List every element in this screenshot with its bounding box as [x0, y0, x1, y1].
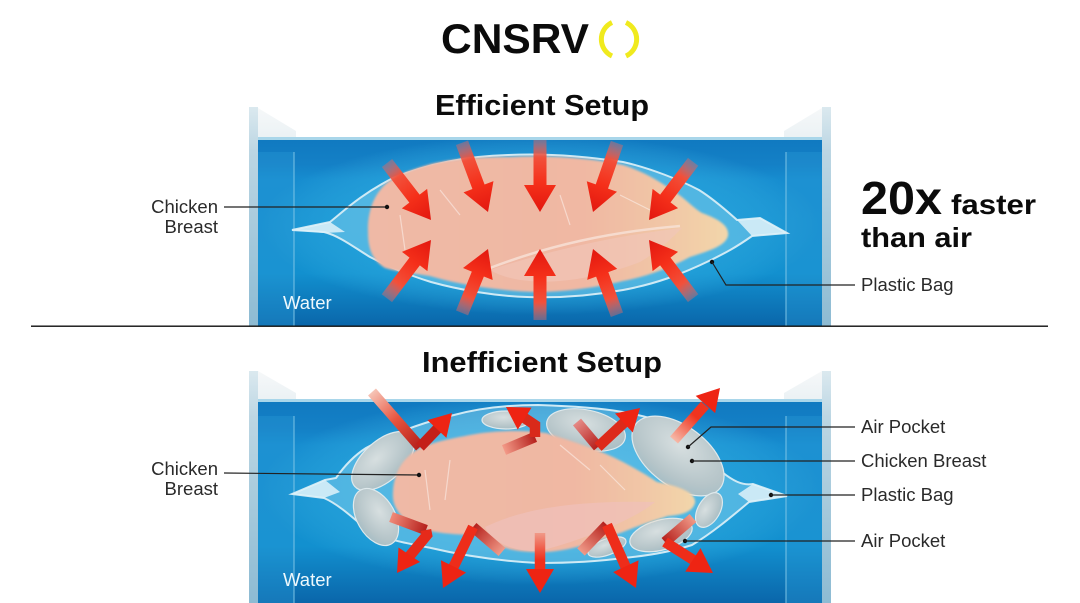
callout: chicken breast, efficient: Chicken: [151, 196, 218, 217]
air pockets: [341, 400, 738, 561]
brand name: CNSRV: [441, 15, 589, 62]
glass corners: [258, 108, 822, 140]
heading: efficient setup: Efficient Setup: [435, 90, 649, 122]
callout: chicken breast, inefficient: [151, 458, 421, 499]
tank walls: [249, 371, 831, 603]
tank walls: [249, 107, 831, 326]
callout: air pocket, bottom: [683, 530, 945, 551]
divider: [31, 326, 1048, 327]
heading: inefficient setup: Inefficient Setup: [422, 347, 662, 379]
callout: chicken breast, inefficient: Chicken: [151, 458, 218, 479]
icon: yellow ring: [601, 22, 637, 56]
arrows escaping: [372, 392, 705, 575]
plastic bag: [292, 154, 787, 297]
panel: efficient setup tank: [249, 107, 831, 326]
glass corners: [258, 371, 822, 402]
water: [258, 400, 822, 603]
callout: chicken breast, right: [690, 450, 986, 471]
callout: plastic bag, inefficient: Plastic Bag: [861, 484, 954, 505]
stat: 20x faster than air: than air: [861, 222, 972, 253]
callout: chicken breast, right: Chicken Breast: [861, 450, 986, 471]
water label: Water: [283, 569, 332, 590]
stat: 20x faster than air: faster: [951, 189, 1036, 220]
callout: plastic bag, efficient: [710, 260, 954, 295]
callout: air pocket, bottom: Air Pocket: [861, 530, 945, 551]
callout: air pocket, top: Air Pocket: [861, 416, 945, 437]
chicken breast: [368, 156, 728, 292]
callout: air pocket, top: [686, 416, 945, 449]
water label: Water: [283, 292, 332, 313]
stat: 20x faster than air: 20x: [861, 172, 942, 224]
stat: 20x faster than air: [861, 172, 1036, 253]
panel: inefficient setup tank: [249, 371, 831, 603]
logo: [441, 15, 637, 62]
callout: plastic bag, inefficient: [769, 484, 954, 505]
plastic bag: [292, 405, 787, 563]
chicken breast: [393, 431, 695, 552]
arrows pressing inward: [374, 137, 706, 320]
callout: chicken breast, efficient: [151, 196, 389, 237]
callout: plastic bag, efficient: Plastic Bag: [861, 274, 954, 295]
callout: chicken breast, inefficient: Breast: [165, 478, 218, 499]
callout: chicken breast, efficient: Breast: [165, 216, 218, 237]
water: [258, 138, 822, 326]
